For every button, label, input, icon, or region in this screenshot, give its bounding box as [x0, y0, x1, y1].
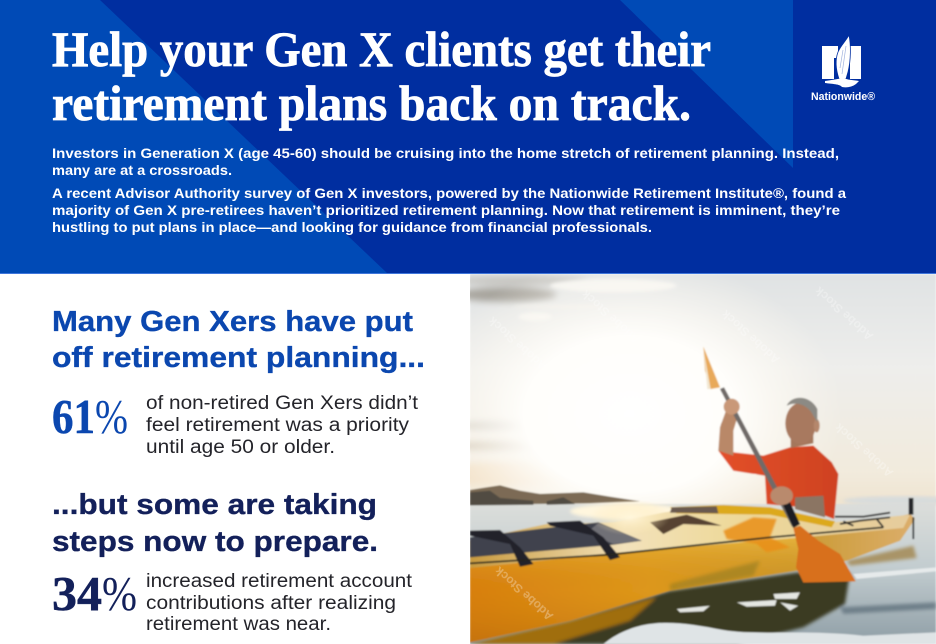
stat: 61% — [52, 389, 128, 444]
text block: 34% description: contributions after realizing — [146, 593, 396, 614]
stat: 61%: 61 — [52, 389, 95, 444]
heading: put off planning: off retirement planning... — [52, 342, 425, 374]
man: head — [790, 434, 814, 448]
panel: left column statistics — [52, 306, 425, 635]
heading: put off planning — [52, 306, 425, 374]
watermarks: Adobe Stock — [485, 314, 549, 373]
panel: blue header — [0, 0, 936, 274]
watermarks: Adobe Stock — [492, 564, 556, 623]
kayak stern gear — [835, 513, 890, 527]
text block: 61% description: feel retirement was a priority — [146, 415, 410, 436]
watermarks: Adobe Stock — [832, 420, 896, 480]
text block: 34% description: retirement was near. — [146, 614, 331, 635]
paddle — [720, 387, 797, 527]
photo: man paddling an orange kayak at sunset — [470, 274, 936, 644]
text block: intro paragraphs: A recent Advisor Authority survey of Gen X investors, powered by the Nationwide Retirement Institute®, found a — [52, 186, 846, 201]
text block: intro paragraphs: hustling to put plans in place—and looking for guidance from financial professionals. — [52, 220, 652, 235]
watermarks — [485, 284, 896, 623]
heading: taking steps — [52, 489, 378, 558]
heading: taking steps: ...but some are taking — [52, 489, 377, 521]
title: retirement plans back on track. — [52, 75, 691, 131]
foreground water reflection — [470, 546, 936, 644]
text block: 61% description — [146, 393, 419, 458]
kayak hull — [470, 514, 915, 642]
icon: Nationwide logo — [811, 35, 875, 103]
text block: intro paragraphs: Investors in Generation X (age 45-60) should be cruising into the home stretch of retirement planning. Instead, — [52, 146, 839, 161]
heading: put off planning: Many Gen Xers have put — [52, 306, 414, 338]
watermarks: Adobe Stock — [599, 424, 663, 483]
distant shoreline — [470, 485, 640, 505]
text block: intro paragraphs — [52, 146, 846, 235]
stat: 34% — [52, 566, 137, 621]
watermarks: Adobe Stock — [812, 284, 876, 343]
text block: intro paragraphs: many are at a crossroads. — [52, 163, 232, 178]
heading: taking steps: steps now to prepare. — [52, 526, 378, 558]
watermarks: Adobe Stock — [579, 287, 643, 347]
man: torso and arms — [718, 446, 838, 519]
icon: Nationwide logo: Nationwide® — [811, 91, 875, 103]
kayak deck — [470, 507, 910, 568]
kayak cockpit rim and hatch — [670, 505, 835, 527]
watermarks: Adobe Stock — [719, 307, 783, 367]
title: Help your Gen X clients get their — [52, 21, 711, 77]
text block: 61% description: of non-retired Gen Xers didn’t — [146, 393, 419, 414]
text block: 34% description — [146, 571, 413, 635]
stat: 34%: % — [102, 566, 137, 621]
title — [52, 21, 711, 131]
stat: 34%: 34 — [52, 566, 102, 621]
text block: intro paragraphs: majority of Gen X pre-retirees haven’t prioritized retirement planning. Now that retirement is imminent, they’re — [52, 203, 840, 218]
text block: 61% description: until age 50 or older. — [146, 437, 335, 458]
stat: 61%: % — [95, 389, 128, 444]
text block: 34% description: increased retirement account — [146, 571, 413, 592]
man: hands over paddle — [724, 399, 740, 415]
